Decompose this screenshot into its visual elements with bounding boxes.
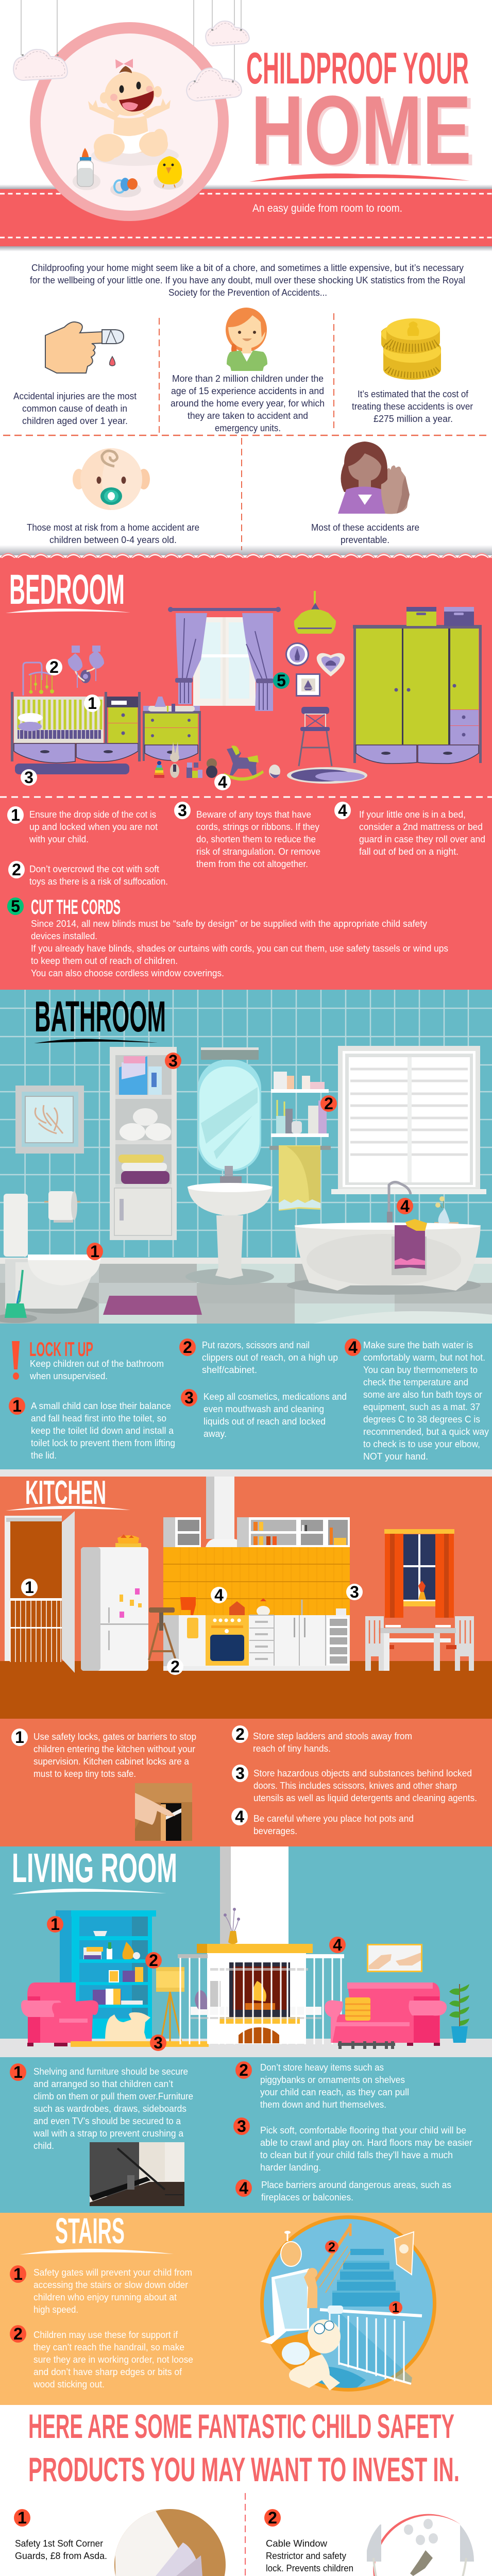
- living room badges: 3: [154, 2033, 163, 2052]
- tip 4: [345, 1338, 489, 1462]
- lower cabinets and oven: [163, 1615, 350, 1671]
- red band: [0, 184, 492, 251]
- bathroom badges: 1: [90, 1242, 99, 1261]
- tip 1: with your child.: [29, 834, 89, 844]
- tip 3: Pick soft, comfortable flooring that your child will be: [260, 2125, 466, 2136]
- tip 2: Don’t store heavy items such as: [260, 2062, 384, 2073]
- tip 3: away.: [203, 1429, 227, 1439]
- stairs background: [0, 2213, 492, 2405]
- tip 4: [334, 801, 485, 857]
- tip: lock it up: [12, 1338, 164, 1381]
- text: accidental injuries: [13, 391, 137, 426]
- wall pictures: [285, 642, 345, 697]
- swoosh: [34, 1039, 158, 1043]
- tip 4: Make sure the bath water is: [363, 1340, 473, 1350]
- tip 4: NOT your hand.: [363, 1451, 428, 1462]
- vase and twigs: [224, 1908, 240, 1944]
- icon: woman: [226, 308, 267, 371]
- tip 4: equipment, such as a mat. 37: [363, 1402, 480, 1412]
- products section: [14, 2414, 474, 2576]
- text: 2 million children: around the home every year, for which: [171, 398, 325, 409]
- tip 4: check the temperature and: [363, 1377, 468, 1387]
- bathtub: [287, 1182, 481, 1295]
- sink: [185, 1166, 274, 1285]
- tip 3: risk of strangulation. Or remove: [196, 846, 320, 857]
- tip 1: 1: [13, 2265, 23, 2283]
- window and blind: [331, 1046, 486, 1194]
- icon: cloud left: [13, 49, 67, 80]
- text: 2 million children: they are taken to accident and: [188, 411, 308, 421]
- tip 3: doors. This includes scissors, knives and other sharp: [253, 1781, 457, 1791]
- tip 4: fireplaces or balconies.: [261, 2192, 353, 2202]
- safety gate: [178, 1954, 344, 2044]
- text: 2 million children: More than 2 million children under the: [172, 374, 324, 384]
- text: most at risk: children between 0-4 years old.: [49, 535, 177, 545]
- kitchen stool: [149, 1607, 176, 1660]
- tip 3: do, shorten them to reduce the: [196, 834, 316, 844]
- tip 5: cut the cords: CUT THE CORDS: [31, 896, 121, 919]
- tip 4: Be careful where you place hot pots and: [253, 1814, 414, 1824]
- stool: [299, 707, 332, 766]
- yellow towel: [269, 1145, 331, 1211]
- tip 5: cut the cords: devices installed.: [31, 931, 97, 941]
- icon: baby: [88, 59, 179, 166]
- tip 1: 1: [12, 1397, 22, 1415]
- tip 1: [9, 1397, 175, 1461]
- stairs section: [0, 2211, 492, 2405]
- photo: cabinet lock: [135, 1783, 192, 1841]
- dresser: [143, 697, 201, 761]
- tip 1: the lid.: [31, 1450, 57, 1461]
- tip 2: Put razors, scissors and nail: [202, 1340, 310, 1350]
- tip 1: such as wardrobes, draws, sideboards: [33, 2104, 186, 2114]
- title swoosh: [249, 174, 470, 182]
- kitchen badges: [21, 1578, 363, 1676]
- product 2: 2: [268, 2509, 277, 2527]
- tip 4: consider a 2nd mattress or bed: [359, 822, 483, 832]
- door with gate: [5, 1511, 75, 1673]
- heading: products: [28, 2407, 460, 2488]
- tip 2: piggybanks or ornaments on shelves: [260, 2075, 405, 2085]
- kitchen badges: 3: [350, 1583, 359, 1601]
- tip: lock it up: LOCK IT UP: [29, 1338, 93, 1361]
- purple towel and sponge: [392, 1219, 427, 1275]
- fireplace: [191, 1944, 321, 2044]
- bathroom wall and tiles: [0, 990, 492, 1469]
- bedroom badges: 4: [218, 773, 227, 791]
- heading: bathroom: BATHROOM: [35, 992, 166, 1041]
- tip 1: and fall head first into the toilet, so: [31, 1413, 166, 1423]
- tip 3: [174, 801, 320, 869]
- text: accidental injuries: children aged over 1 year.: [22, 416, 128, 426]
- icon: pacifier: [110, 178, 141, 197]
- dark bars: [338, 2041, 395, 2049]
- cot: [11, 692, 141, 763]
- tip 1: child.: [33, 2141, 54, 2151]
- divider: [0, 796, 492, 798]
- tip 5: cut the cords: to keep them out of reach of children.: [31, 956, 178, 966]
- hanging lamp: [294, 591, 336, 634]
- yellow rug: [71, 2041, 209, 2047]
- tip 2: them down and hurt themselves.: [260, 2099, 386, 2110]
- tip 4: beverages.: [253, 1826, 297, 1836]
- tip 1: 1: [13, 2063, 23, 2081]
- tip 5: cut the cords: If you already have blinds, shades or curtains with cords, you can cut them, use safety tassels or wind ups: [31, 943, 448, 954]
- icon: coins: [381, 318, 441, 380]
- wall shelves: [271, 1072, 329, 1137]
- heading: living room: LIVING ROOM: [12, 1845, 177, 1891]
- text: accidental injuries: common cause of death in: [22, 403, 127, 414]
- intro text: for the wellbeing of your little one. If you have any doubt, mull over these shocking UK statistics from the Royal: [30, 275, 465, 285]
- bookcase: [56, 1910, 156, 2039]
- tip 2: 2: [235, 1725, 245, 1743]
- illustration: baby at stair gate: 2: [328, 2240, 335, 2255]
- text: cost: [352, 389, 473, 424]
- text: preventable: Most of these accidents are: [311, 522, 419, 533]
- tip 3: 3: [178, 801, 187, 820]
- tip 1: Shelving and furniture should be secure: [33, 2066, 188, 2077]
- shelf unit: [110, 1047, 177, 1240]
- roll mat: [15, 764, 129, 774]
- tip 3: Store hazardous objects and substances behind locked: [253, 1768, 472, 1778]
- bedroom badges: 1: [88, 694, 97, 713]
- living room badges: 1: [50, 1915, 60, 1934]
- tip 1: keep the toilet lid down and install a: [31, 1426, 174, 1436]
- tip 4: [235, 2179, 451, 2202]
- heading: bedroom: BEDROOM: [9, 566, 125, 613]
- swoosh: [20, 2249, 174, 2255]
- tip 2: reach of tiny hands.: [253, 1743, 331, 1754]
- tip 1: accessing the stairs or slow down older: [33, 2280, 188, 2290]
- tip 2: [232, 1725, 412, 1754]
- tip 4: If your little one is in a bed,: [359, 809, 466, 820]
- photo: window restrictor: [367, 2514, 474, 2576]
- swoosh: [6, 1506, 130, 1511]
- toilet roll: [44, 1191, 80, 1223]
- icon: cloud top: [206, 21, 249, 46]
- living room badges: 4: [333, 1936, 342, 1954]
- product 2: Restrictor and safety: [266, 2551, 346, 2561]
- mobile toy: [23, 663, 54, 696]
- tip 1: children who enjoy running about at: [33, 2292, 177, 2302]
- tip 5: cut the cords: Since 2014, all new blinds must be “safe by design” or be supplied with the appropriate child safety: [31, 919, 427, 929]
- right armchair: [325, 1982, 447, 2046]
- tip 2: shelf/cabinet.: [202, 1365, 257, 1375]
- upper cabinets: [163, 1517, 350, 1547]
- tip 2: they can’t reach the handrail, so make: [33, 2342, 184, 2352]
- photo: tv strap: [90, 2142, 184, 2206]
- tip 3: 3: [237, 2117, 246, 2136]
- subtitle: An easy guide from room to room.: [252, 202, 402, 214]
- baby circle: [30, 22, 229, 221]
- bathroom section: [0, 990, 492, 1469]
- tip 2: sure they are in working order, not loose: [33, 2354, 193, 2365]
- tip 3: Beware of any toys that have: [196, 809, 311, 820]
- tip 3: even mouthwash and cleaning: [203, 1404, 324, 1414]
- text: preventable: [311, 522, 419, 545]
- tip 4: fall out of bed on a night.: [359, 846, 459, 857]
- tip 3: utensils as well as liquid detergents and cleaning agents.: [253, 1793, 477, 1803]
- tip 4: some are also fun bath toys or: [363, 1389, 482, 1400]
- tip 1: Ensure the drop side of the cot is: [29, 809, 156, 820]
- living room background: [0, 1846, 492, 2213]
- backsplash: [163, 1547, 350, 1615]
- kitchen section: [0, 1469, 492, 1846]
- counter items: [180, 1597, 346, 1616]
- tip 2: Don’t overcrowd the cot with soft: [29, 864, 159, 874]
- tip 1: supervision. Kitchen cabinet locks are a: [33, 1756, 190, 1767]
- tip 2: toys as there is a risk of suffocation.: [29, 876, 168, 887]
- tip 2: 2: [183, 1338, 192, 1357]
- tip 3: Keep all cosmetics, medications and: [203, 1392, 347, 1402]
- right window: [384, 1529, 454, 1618]
- tip 1: children entering the kitchen without your: [33, 1744, 195, 1754]
- tip 4: You can buy thermometers to: [363, 1365, 478, 1375]
- stat dividers: [159, 313, 334, 550]
- tip 1: Use safety locks, gates or barriers to stop: [33, 1732, 196, 1742]
- kitchen badges: 1: [25, 1578, 34, 1597]
- tip 4: degrees C to 38 degrees C is: [363, 1414, 480, 1425]
- tip 4: 4: [348, 1338, 358, 1357]
- tip 2: 2: [13, 2325, 23, 2343]
- text: most at risk: Those most at risk from a home accident are: [27, 522, 199, 533]
- window and curtains: [168, 607, 281, 711]
- floor lamp: [156, 1967, 184, 2042]
- tip 1: climb on them or pull them over.Furniture: [33, 2091, 193, 2102]
- tip 3: [232, 1764, 477, 1803]
- tip 4: to check is to use your elbow,: [363, 1439, 480, 1449]
- icon: bottle: [73, 148, 100, 190]
- heading: kitchen: KITCHEN: [25, 1473, 106, 1511]
- bedroom badges: 2: [49, 658, 59, 676]
- tip 3: able to crawl and play on. Hard floors may be easier: [260, 2138, 472, 2148]
- rug: [287, 767, 367, 784]
- tip 2: 2: [12, 860, 21, 879]
- photo: corner guard: [114, 2509, 226, 2576]
- wardrobe: [353, 607, 482, 764]
- product 1: [14, 2509, 107, 2561]
- tip 2: wood sticking out.: [33, 2379, 105, 2389]
- bedroom background: [0, 545, 492, 990]
- tip 2: 2: [239, 2061, 248, 2079]
- tip 2: [10, 2325, 193, 2389]
- tip 3: to clean but if your child falls they’ll have a much: [260, 2150, 453, 2160]
- bathroom badges: 4: [400, 1197, 410, 1215]
- tip 1: A small child can lose their balance: [31, 1401, 171, 1411]
- extractor hood: [206, 1477, 242, 1547]
- tip: lock it up: Keep children out of the bathroom: [30, 1359, 164, 1369]
- text: cost: treating these accidents is over: [352, 401, 473, 412]
- tip 1: Safety gates will prevent your child from: [33, 2267, 192, 2278]
- tip 5: cut the cords: You can also choose cordless window coverings.: [31, 968, 224, 978]
- text: most at risk: [27, 522, 199, 545]
- picture: [15, 1086, 84, 1154]
- tip 4: 4: [338, 801, 347, 820]
- swoosh: [12, 1889, 166, 1894]
- product 1: 1: [18, 2509, 27, 2527]
- text: 2 million children: [171, 374, 325, 433]
- dog: [105, 2012, 150, 2041]
- icon: cloud right: [186, 68, 242, 101]
- swoosh: [6, 608, 130, 613]
- tip 1: wall with a strap to prevent crushing a: [33, 2128, 184, 2139]
- tip 2: Store step ladders and stools away from: [253, 1731, 412, 1741]
- wall sconce: [68, 646, 104, 688]
- tip 1: [10, 2265, 192, 2315]
- living room badges: [47, 1915, 346, 2052]
- tip 4: [231, 1807, 414, 1836]
- tip 4: 4: [235, 1807, 244, 1826]
- product 2: lock. Prevents children: [266, 2563, 353, 2573]
- bedroom section: [0, 545, 492, 990]
- product dividers: [245, 2493, 246, 2576]
- tip 3: liquids out of reach and locked: [203, 1416, 326, 1427]
- text: cost: £275 million a year.: [374, 414, 453, 424]
- wall art: [367, 1944, 422, 1972]
- dining table and chairs: [365, 1616, 474, 1671]
- tip 3: harder landing.: [260, 2162, 321, 2173]
- tip 1: [11, 1728, 196, 1779]
- product 2: [264, 2509, 380, 2576]
- floor: [0, 1264, 492, 1324]
- tip 1: [10, 2063, 193, 2151]
- bathroom badges: 3: [168, 1052, 178, 1070]
- urn: [195, 1990, 207, 2009]
- tip 3: 3: [235, 1764, 245, 1783]
- text: cost: It’s estimated that the cost of: [358, 389, 469, 399]
- text: 2 million children: emergency units.: [215, 423, 281, 433]
- tip 4: 4: [239, 2179, 248, 2197]
- tip 1: toilet lock to prevent them from lifting: [31, 1438, 175, 1448]
- text: accidental injuries: Accidental injuries are the most: [13, 391, 137, 401]
- tip 4: guard in case they roll over and: [359, 834, 485, 844]
- living room section: [0, 1845, 492, 2213]
- tip 3: cords, strings or ribbons. If they: [196, 822, 319, 832]
- tip 2: [8, 860, 168, 887]
- mobile strings: [21, 0, 241, 81]
- toilet: [4, 1194, 100, 1314]
- bedroom badges: [21, 658, 290, 791]
- statistics section: [3, 308, 488, 550]
- tip 2: Children may use these for support if: [33, 2330, 178, 2340]
- tip 2: clippers out of reach, on a high up: [202, 1352, 338, 1363]
- heading: stairs: STAIRS: [55, 2211, 125, 2251]
- tip 4: recommended, but a quick way: [363, 1427, 489, 1437]
- plant: [449, 1984, 469, 2043]
- living room badges: 2: [149, 1951, 158, 1970]
- illustration: baby at stair gate: 1: [392, 2301, 399, 2315]
- header section: [0, 0, 492, 251]
- tip 1: must to keep tiny tots safe.: [33, 1769, 136, 1779]
- intro text: Society for the Prevention of Accidents...: [168, 287, 327, 298]
- bedroom badges: 5: [277, 671, 286, 690]
- tip 1: high speed.: [33, 2304, 78, 2315]
- bath mat: [103, 1296, 202, 1315]
- tip 2: and don’t have sharp edges or bits of: [33, 2367, 182, 2377]
- bathroom badges: [87, 1052, 413, 1261]
- tip 3: [181, 1388, 347, 1439]
- icon: chick: [154, 156, 183, 190]
- kitchen background: [0, 1469, 492, 1846]
- kitchen badges: 2: [171, 1657, 180, 1676]
- tip 2: [179, 1338, 338, 1375]
- illustration: baby at stair gate: [260, 2215, 436, 2393]
- product 2: Cable Window: [266, 2538, 328, 2549]
- toys: [154, 742, 280, 781]
- tip 4: comfortably warm, but not hot.: [363, 1352, 485, 1363]
- tip 1: up and locked when you are not: [29, 822, 158, 832]
- tip 3: 3: [184, 1388, 194, 1407]
- tip 5: cut the cords: [7, 896, 448, 978]
- tip 3: them from the cot altogether.: [196, 859, 308, 869]
- toilet brush: [0, 1270, 37, 1323]
- bedroom badges: 3: [24, 768, 33, 787]
- kitchen badges: 4: [214, 1586, 224, 1604]
- product 1: Safety 1st Soft Corner: [15, 2538, 103, 2549]
- tip 1: and even TV’s should be secured to a: [33, 2116, 181, 2126]
- tip: lock it up: when unsupervised.: [29, 1371, 108, 1381]
- text: 2 million children: age of 15 experience accidents in and: [171, 386, 324, 396]
- tip 2: [235, 2061, 409, 2110]
- product 1: Guards, £8 from Asda.: [15, 2551, 107, 2561]
- tip 1: and arranged so that children can’t: [33, 2079, 173, 2089]
- icon: injured finger: [45, 322, 124, 373]
- tip 3: [233, 2117, 472, 2173]
- tip 5: cut the cords: 5: [11, 897, 20, 916]
- tip 1: 1: [15, 1728, 24, 1747]
- bathroom badges: 2: [324, 1094, 333, 1113]
- fridge: [81, 1534, 148, 1671]
- tip 2: your child can reach, as they can pull: [260, 2087, 409, 2097]
- icon: woman with raised hand: [338, 442, 410, 514]
- tip 1: [7, 806, 158, 844]
- intro text: Childproofing your home might seem like a bit of a chore, and sometimes a little expensive, but it’s necessary: [31, 263, 464, 273]
- intro text: [30, 263, 465, 298]
- icon: baby head: [73, 448, 150, 510]
- text: preventable: preventable.: [341, 535, 389, 545]
- tip 1: 1: [11, 806, 20, 824]
- mirror: [198, 1047, 261, 1171]
- tip 4: Place barriers around dangerous areas, such as: [261, 2180, 451, 2190]
- left armchair: [21, 1982, 98, 2046]
